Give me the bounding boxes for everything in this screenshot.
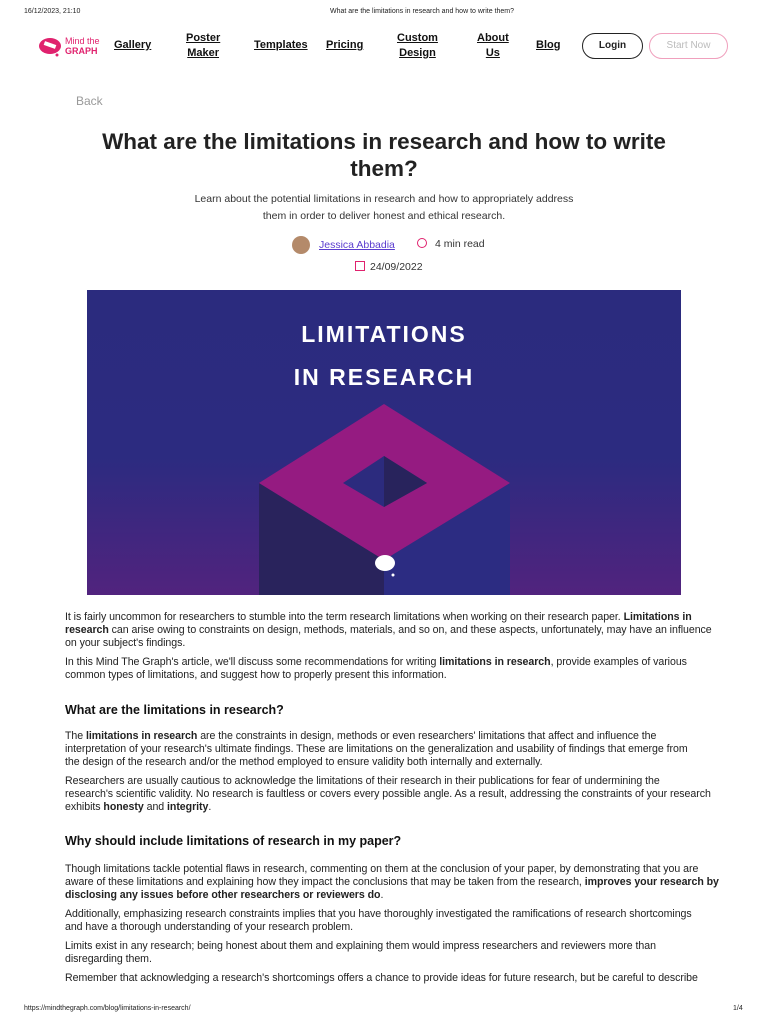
author and read time: 4 min read (435, 238, 485, 250)
title: What are the limitations in research and how to write (102, 129, 666, 154)
hero heading: IN RESEARCH (294, 364, 474, 390)
print footer: 1/4 (733, 1005, 743, 1012)
paragraph 2: In this Mind The Graph's article, we'll discuss some recommendations for writing limitations in research, provide examples of various (65, 656, 687, 668)
box right side (384, 483, 510, 595)
paragraph 6: Additionally, emphasizing research constraints implies that you have thoroughly investigated the ramifications of research shortcomings (65, 908, 692, 920)
navigation: Pricing (326, 39, 363, 51)
login button (582, 33, 643, 59)
navigation: Templates (254, 39, 308, 51)
paragraph 6 (65, 908, 692, 933)
print header: 16/12/2023, 21:10 (24, 8, 80, 15)
author and read time (292, 236, 485, 254)
hero image (87, 290, 681, 595)
date: 24/09/2022 (370, 261, 423, 273)
hero heading: LIMITATIONS (301, 321, 467, 347)
print header: What are the limitations in research and how to write them? (330, 8, 514, 15)
subtitle: them in order to deliver honest and ethical research. (263, 210, 505, 222)
subtitle: Learn about the potential limitations in research and how to appropriately address (195, 193, 573, 205)
navigation: Us (486, 47, 500, 59)
paragraph 5: aware of these limitations and explaining how they impact the conclusions that may be taken from the research, improves your research by (65, 876, 719, 888)
print footer (24, 1004, 743, 1012)
hero heading (294, 321, 474, 390)
paragraph 7 (65, 940, 656, 965)
paragraph 3: the design of the research and/or the method employed to ensure validity both internally and externally. (65, 756, 542, 768)
paragraph 5 (65, 863, 719, 901)
heading 2: Why should include limitations of research in my paper? (65, 834, 401, 848)
start now button (649, 33, 728, 59)
navigation (114, 32, 560, 59)
paragraph 5: Though limitations tackle potential flaws in research, commenting on them at the conclusion of your paper, by demonstrating that you are (65, 863, 698, 875)
navigation: Custom (397, 32, 438, 44)
paragraph 8: Remember that acknowledging a research's shortcomings offers a chance to provide ideas for future research, but be careful to describe (65, 972, 698, 984)
paragraph 2 (65, 656, 687, 681)
navigation: About (477, 32, 509, 44)
top diamond (259, 404, 510, 560)
logo (39, 36, 100, 56)
paragraph 7: Limits exist in any research; being honest about them and explaining them would impress researchers and reviewers more than (65, 940, 656, 952)
logo: GRAPH (65, 46, 98, 56)
navigation: Gallery (114, 39, 151, 51)
paragraph 4: Researchers are usually cautious to acknowledge the limitations of their research in their publications for fear of undermining the (65, 775, 660, 787)
logo: Mind the (65, 36, 100, 46)
print footer: https://mindthegraph.com/blog/limitations-in-research/ (24, 1005, 191, 1012)
paragraph 4: exhibits honesty and integrity. (65, 801, 211, 813)
back link: Back (76, 94, 103, 108)
print header (24, 8, 514, 15)
hole (343, 456, 427, 507)
box left side (259, 483, 384, 595)
paragraph 4 (65, 775, 711, 813)
navigation: Design (399, 47, 436, 59)
paragraph 1 (65, 611, 712, 649)
navigation: Maker (187, 47, 219, 59)
paragraph 5: disclosing any issues before other researchers or reviewers do. (65, 889, 383, 901)
start now button: Start Now (667, 40, 710, 51)
paragraph 3: The limitations in research are the constraints in design, methods or even researchers' limitations that affect and influence the (65, 730, 656, 742)
paragraph 1: It is fairly uncommon for researchers to stumble into the term research limitations when working on their research paper. Limitations in (65, 611, 692, 623)
paragraph 1: research can arise owing to constraints on design, methods, materials, and so on, and these aspects, unfortunately, may have an influence (65, 624, 712, 636)
paragraph 2: common types of limitations, and suggest how to properly present this information. (65, 669, 447, 681)
paragraph 3 (65, 730, 688, 768)
paragraph 7: disregarding them. (65, 953, 152, 965)
author and read time: Jessica Abbadia (319, 239, 395, 251)
navigation: Blog (536, 39, 560, 51)
subtitle (195, 193, 573, 222)
heading 1: What are the limitations in research? (65, 703, 284, 717)
login button: Login (599, 40, 626, 51)
logo icon (375, 555, 395, 571)
paragraph 4: research's scientific validity. No research is faultless or covers every possible angle. As a result, addressing the constraints of your research (65, 788, 711, 800)
paragraph 6: and have a thorough understanding of your research problem. (65, 921, 353, 933)
title (102, 129, 666, 181)
paragraph 3: interpretation of your research's ultimate findings. These are limitations on the generalization and usability of findings that emerge from (65, 743, 688, 755)
paragraph 1: on your subject's findings. (65, 637, 185, 649)
navigation: Poster (186, 32, 220, 44)
title: them? (350, 156, 418, 181)
